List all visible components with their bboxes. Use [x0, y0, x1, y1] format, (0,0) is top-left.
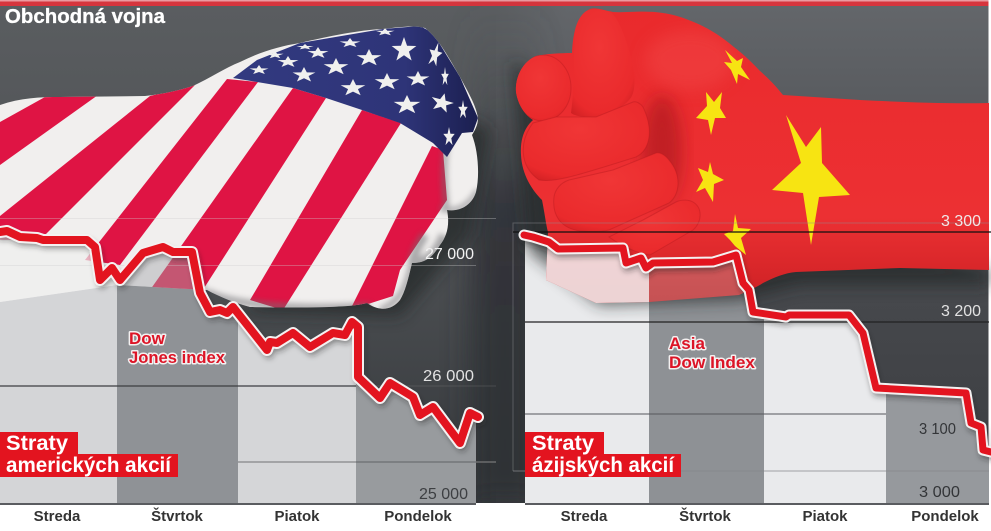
day labels: right chart: Pondelok — [911, 508, 979, 525]
label: Asia Dow Index — [669, 334, 756, 372]
day labels: right chart: Piatok — [802, 508, 848, 525]
day labels: left chart: Piatok — [274, 508, 320, 525]
hand highlight — [649, 32, 730, 87]
label: Dow Jones index: Dow — [129, 329, 166, 348]
day labels: right chart: Štvrtok — [679, 507, 731, 525]
day labels: left chart: Štvrtok — [151, 507, 203, 525]
knuckle shading — [207, 140, 478, 310]
right day columns — [525, 240, 989, 503]
axis labels: Dow Jones: 26 000 — [423, 368, 474, 385]
axis labels: Asia Dow: 3 200 — [941, 303, 981, 320]
axis labels: Dow Jones: 25 000 — [419, 486, 468, 503]
label: Dow Jones index — [129, 329, 226, 367]
axis labels: Asia Dow: 3 300 — [941, 213, 981, 230]
axis labels: Asia Dow: 3 000 — [919, 484, 960, 501]
illustration: fist with American flag — [0, 20, 490, 320]
callout: Straty ázijských akcií: ázijských akcií — [532, 454, 675, 477]
axis labels: Dow Jones: 27 000 — [425, 246, 474, 263]
axis labels: Dow Jones — [419, 246, 474, 503]
label: Asia Dow Index: Dow Index — [669, 353, 756, 372]
axis labels: Asia Dow: 3 100 — [919, 421, 956, 438]
fist shadows — [240, 60, 989, 316]
Dow Jones line chart — [0, 231, 480, 447]
label: Dow Jones index: Jones index — [129, 348, 226, 367]
red stripes — [0, 79, 447, 310]
callout: Straty ázijských akcií: Straty — [532, 432, 594, 455]
day labels: left chart: Streda — [34, 508, 81, 525]
flag stars — [696, 50, 850, 255]
callout: Straty amerických akcií: Straty — [6, 432, 68, 455]
label: Asia Dow Index: Asia — [669, 334, 705, 353]
day labels: left chart: Pondelok — [384, 508, 452, 525]
left day columns — [0, 285, 476, 503]
title: Obchodná vojna — [5, 5, 166, 28]
callout: Straty amerických akcií — [0, 432, 178, 477]
fingers — [515, 9, 700, 255]
palm shadow — [642, 95, 682, 205]
axis labels: Asia Dow — [919, 213, 981, 501]
callout: Straty amerických akcií: amerických akcií — [6, 454, 172, 477]
day labels: right chart: Streda — [561, 508, 608, 525]
callout: Straty ázijských akcií — [525, 432, 681, 477]
grid lines — [0, 218, 991, 504]
translucent left columns over flag — [0, 237, 193, 289]
day labels: left chart — [34, 507, 452, 525]
illustration: fist with Chinese flag — [510, 0, 991, 310]
Asia Dow line chart — [524, 235, 991, 456]
blue canton — [233, 26, 478, 157]
day labels: right chart — [561, 507, 979, 525]
translucent right columns over fist — [546, 248, 744, 303]
canton stars — [249, 28, 468, 145]
top red rule — [0, 0, 991, 6]
